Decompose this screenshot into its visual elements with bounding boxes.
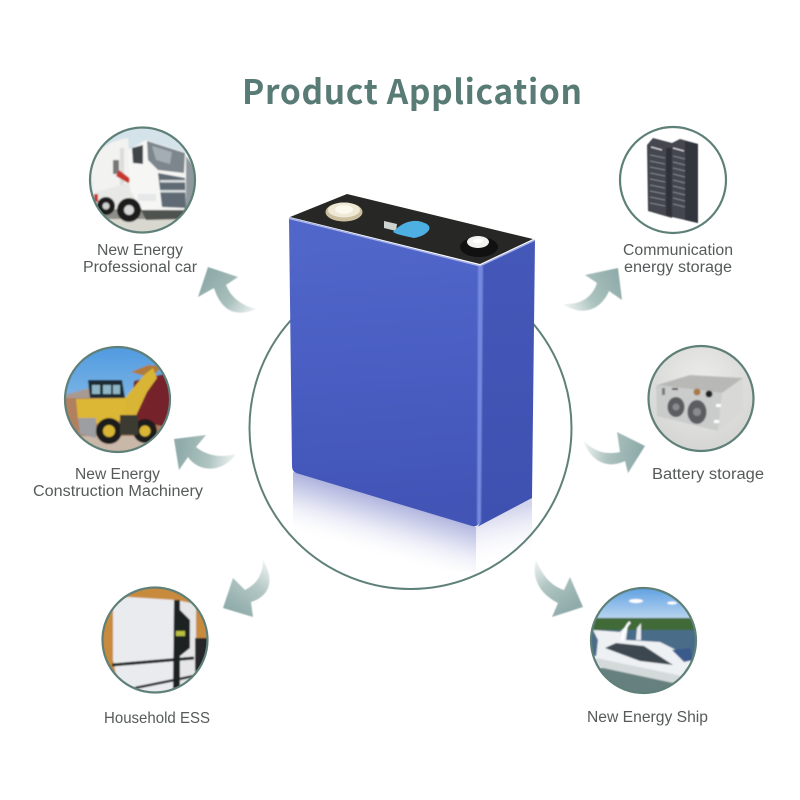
battery corner highlight — [477, 266, 483, 525]
label: New Energy Ship — [587, 709, 708, 726]
battery top edge highlight — [289, 218, 535, 266]
photo: battery storage unit — [648, 345, 754, 453]
label: Construction Machinery — [33, 483, 203, 500]
application: new energy construction machinery — [33, 346, 203, 500]
battery top face — [290, 194, 533, 264]
application: new energy ship — [587, 587, 708, 726]
battery cell — [289, 194, 535, 527]
title: Product Application — [242, 65, 582, 114]
label: Household ESS — [104, 710, 210, 727]
ring — [620, 127, 726, 233]
label: energy storage — [624, 259, 732, 276]
vent label — [384, 221, 430, 238]
negative terminal — [460, 236, 498, 257]
positive terminal — [326, 202, 362, 222]
photo: truck — [91, 128, 194, 232]
label: New Energy — [75, 466, 160, 483]
label: Battery storage — [652, 466, 764, 483]
label: Professional car — [83, 259, 197, 276]
photo: rack cabinets — [647, 138, 698, 223]
arrow: to construction machinery — [174, 435, 236, 470]
label: Communication — [623, 242, 733, 259]
ring — [591, 588, 696, 693]
ring — [65, 347, 170, 452]
central ring — [250, 267, 572, 589]
ring — [102, 588, 208, 692]
photo: wheel loader — [64, 346, 172, 454]
battery side face — [477, 240, 535, 527]
label — [83, 242, 197, 276]
application: communication energy storage — [620, 127, 733, 276]
ring — [90, 128, 195, 232]
arrow: to new energy ship — [535, 560, 583, 617]
application: new energy professional car — [83, 126, 198, 276]
arrow: to household ESS — [223, 560, 269, 617]
photo: yacht — [590, 587, 698, 696]
ring — [648, 346, 754, 451]
photo: home battery cabinet — [104, 588, 206, 692]
battery front face — [289, 219, 480, 526]
label: New Energy — [97, 242, 183, 259]
label — [33, 466, 203, 500]
application: battery storage — [648, 345, 764, 483]
arrow: to communication energy storage — [563, 268, 622, 311]
application: household ESS — [100, 586, 211, 727]
arrow: to battery storage — [583, 432, 645, 473]
arrow: to professional car — [198, 267, 256, 313]
battery reflection — [293, 472, 532, 572]
label — [623, 242, 733, 276]
